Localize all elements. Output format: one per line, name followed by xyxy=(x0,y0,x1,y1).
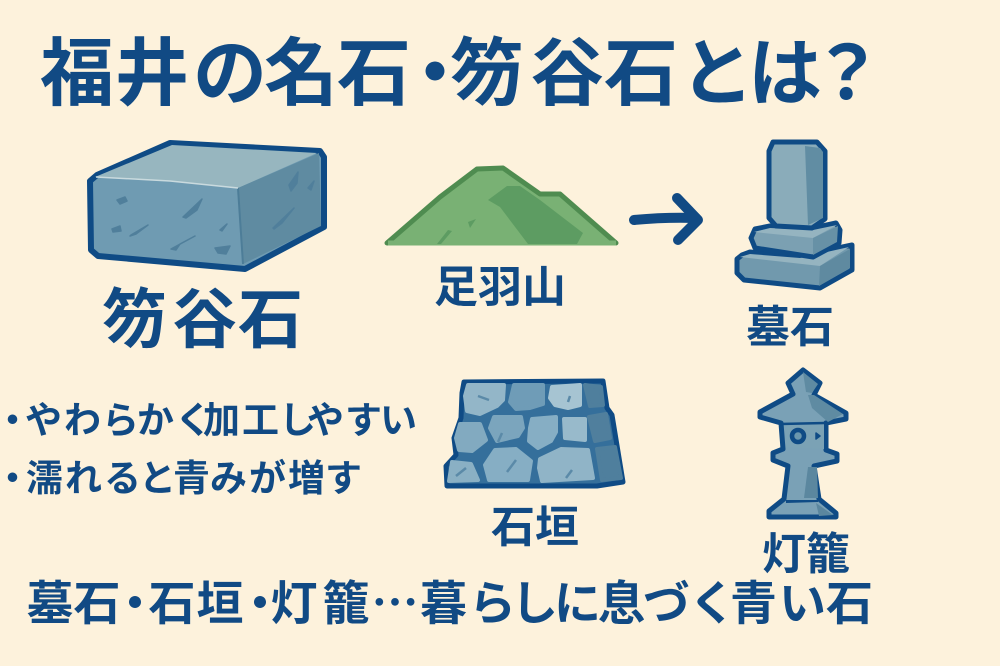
icon: stone lantern xyxy=(760,370,846,517)
label: Mt. Asuwa: 足羽山 xyxy=(434,263,566,312)
label: lantern: 灯籠 xyxy=(762,530,850,579)
bullet: turns bluer when wet: ・濡れると青みが増す xyxy=(0,458,362,499)
label: stone wall: 石垣 xyxy=(491,503,579,552)
title: 福井の名石・笏谷石とは？ xyxy=(40,32,884,115)
icon: stone wall xyxy=(446,381,623,486)
bottom tagline: … xyxy=(372,565,418,634)
icon: shakudani stone block xyxy=(90,143,324,269)
icon: arrow xyxy=(634,198,698,240)
bottom tagline: 墓石・石垣・灯籠 xyxy=(26,577,370,630)
label: shakudani stone: 笏谷石 xyxy=(102,283,303,356)
bottom tagline: 暮らしに息づく青い石 xyxy=(420,577,873,630)
label: gravestone: 墓石 xyxy=(746,303,834,352)
icon: mountain (Mt. Asuwa) xyxy=(387,168,616,244)
icon: gravestone xyxy=(737,142,852,288)
bullet: easy to work: ・やわらかく加工しやすい xyxy=(0,400,417,441)
